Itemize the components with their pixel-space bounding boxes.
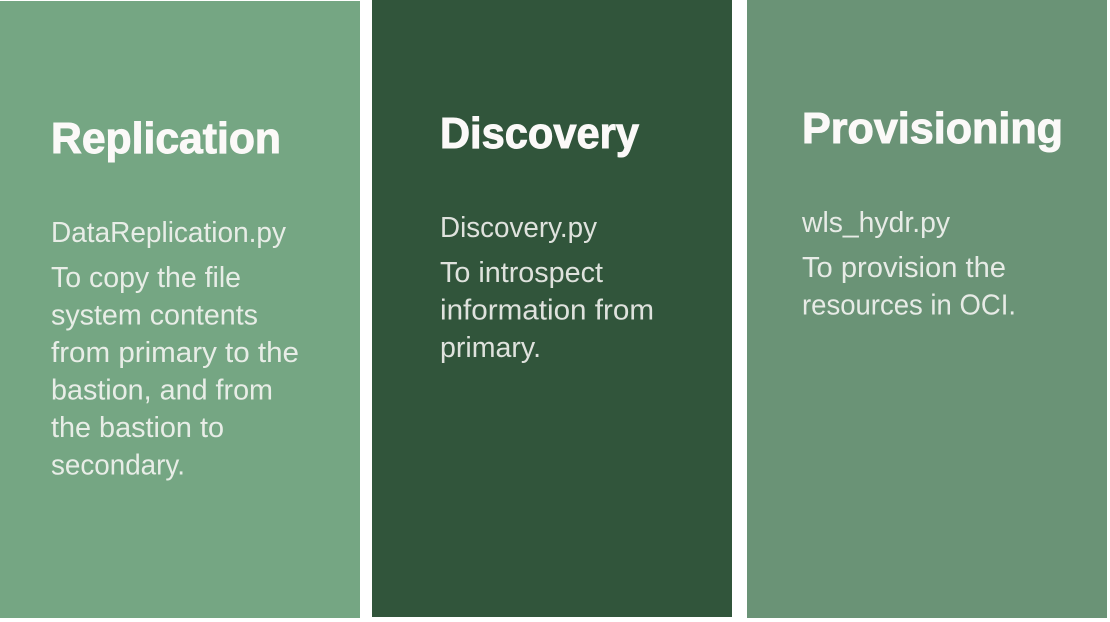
script name: DataReplication.py: DataReplication.py bbox=[51, 217, 286, 249]
panel: replication bbox=[0, 1, 360, 618]
description: replication: bastion, and from bbox=[51, 374, 273, 406]
description: replication: from primary to the bbox=[51, 337, 299, 369]
description: provisioning: resources in OCI. bbox=[802, 290, 1016, 322]
description: discovery: To introspect bbox=[440, 257, 603, 289]
description: discovery bbox=[440, 257, 654, 364]
description: replication: system contents bbox=[51, 300, 258, 332]
description: replication: the bastion to bbox=[51, 412, 224, 444]
panel: provisioning bbox=[747, 0, 1107, 618]
panel: discovery bbox=[372, 0, 732, 617]
description: replication: secondary. bbox=[51, 450, 185, 482]
script name: wls_hydr.py: wls_hydr.py bbox=[801, 207, 950, 239]
description: provisioning bbox=[802, 252, 1016, 322]
description: replication: To copy the file bbox=[51, 262, 241, 294]
description: discovery: primary. bbox=[440, 332, 541, 364]
description: provisioning: To provision the bbox=[802, 252, 1006, 284]
heading: provisioning: Provisioning bbox=[802, 104, 1063, 153]
heading: discovery: Discovery bbox=[440, 109, 639, 158]
script name: Discovery.py: Discovery.py bbox=[440, 212, 597, 244]
description: replication bbox=[51, 262, 299, 482]
heading: replication: Replication bbox=[51, 114, 281, 163]
description: discovery: information from bbox=[440, 294, 654, 326]
